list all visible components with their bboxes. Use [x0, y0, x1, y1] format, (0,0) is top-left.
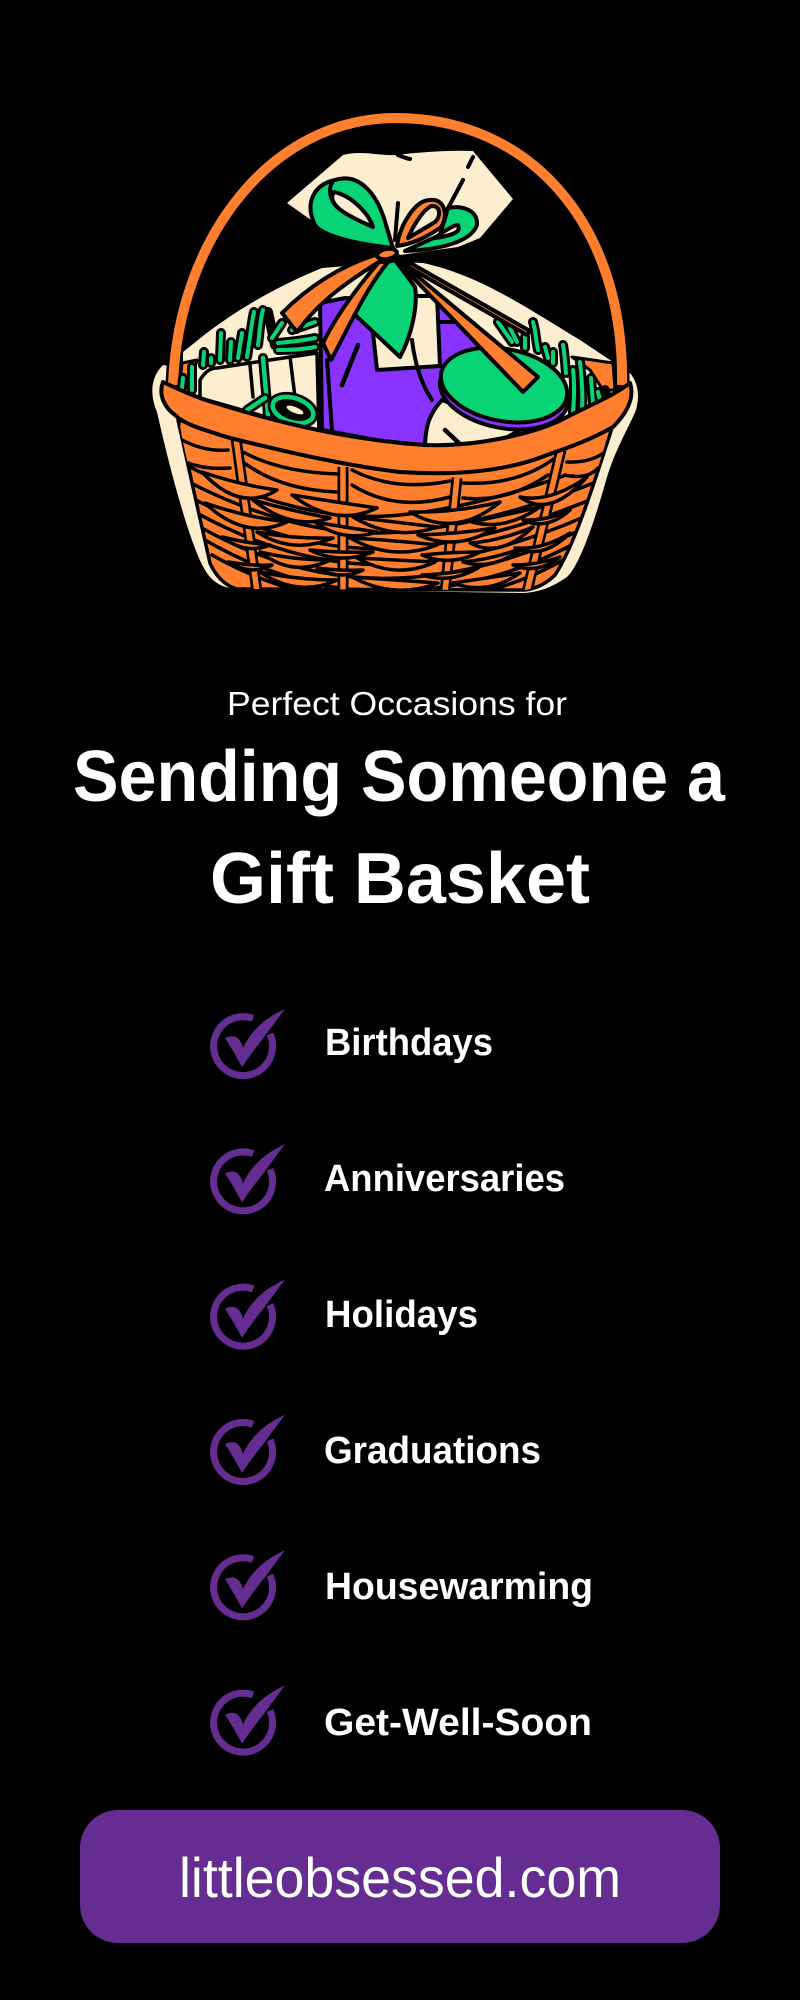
- list item: Birthdays: Birthdays: [325, 1022, 493, 1064]
- bag creases: [398, 155, 473, 210]
- list item: Graduations: Graduations: [324, 1430, 541, 1472]
- black gap behind basket contents: [168, 330, 630, 400]
- icon: check: [214, 1550, 285, 1617]
- icon: check: [214, 1686, 285, 1752]
- icon: check: [214, 1144, 285, 1211]
- basket rim: [161, 382, 631, 473]
- title line 2: Gift Basket: [210, 839, 590, 919]
- list item: Anniversaries: [214, 1144, 565, 1211]
- grass left: [182, 310, 315, 390]
- right ribbon wide: [398, 262, 538, 392]
- knot: [376, 247, 398, 261]
- bow and ribbons: [282, 178, 538, 392]
- vertical posts: [236, 438, 561, 592]
- right ribbon thin: [398, 256, 530, 335]
- icon: check: [214, 1009, 285, 1076]
- title line 1: Sending Someone a: [73, 737, 726, 817]
- subtitle: Perfect Occasions for: [227, 685, 567, 722]
- icon: check: [214, 1415, 285, 1481]
- illustration: gift basket: [152, 118, 638, 603]
- basket cream halo: [152, 365, 638, 593]
- list item: Holidays: [214, 1280, 478, 1346]
- bag top cream: [287, 151, 513, 255]
- back rim orange: [572, 357, 615, 390]
- list item: Anniversaries: Anniversaries: [324, 1158, 565, 1200]
- parallel upper strands: [180, 425, 608, 474]
- weave background lines: [190, 466, 593, 588]
- list item: Graduations: [214, 1415, 541, 1481]
- left ribbon narrow: [323, 262, 388, 360]
- icon: check: [214, 1280, 285, 1346]
- bag lower cream: [183, 262, 613, 400]
- infographic canvas: [75, 113, 726, 1943]
- footer website pill: littleobsessed.com: [179, 1846, 621, 1909]
- list item: Housewarming: Housewarming: [325, 1566, 593, 1608]
- woven lens strands: [202, 472, 587, 590]
- left bow loop: [311, 178, 393, 248]
- grass right: [498, 322, 606, 413]
- list item: Birthdays: [214, 1009, 493, 1076]
- basket body: [178, 420, 625, 603]
- left cream box: [200, 353, 319, 432]
- list item: Get-Well-Soon: Get-Well-Soon: [324, 1702, 592, 1744]
- list item: Holidays: Holidays: [325, 1294, 478, 1336]
- handle: [173, 118, 622, 385]
- left ribbon wide: [282, 255, 382, 332]
- list item: Housewarming: [214, 1550, 593, 1617]
- right bow loop orange: [397, 200, 445, 246]
- round jar: [425, 337, 575, 450]
- right bow loop green: [405, 207, 477, 251]
- purple gift box: [320, 296, 490, 450]
- list item: Get-Well-Soon: [214, 1686, 592, 1752]
- footer website pill: [80, 1810, 720, 1943]
- cream label: [373, 296, 440, 370]
- weave: [180, 425, 608, 590]
- green hanging ribbon: [353, 260, 416, 357]
